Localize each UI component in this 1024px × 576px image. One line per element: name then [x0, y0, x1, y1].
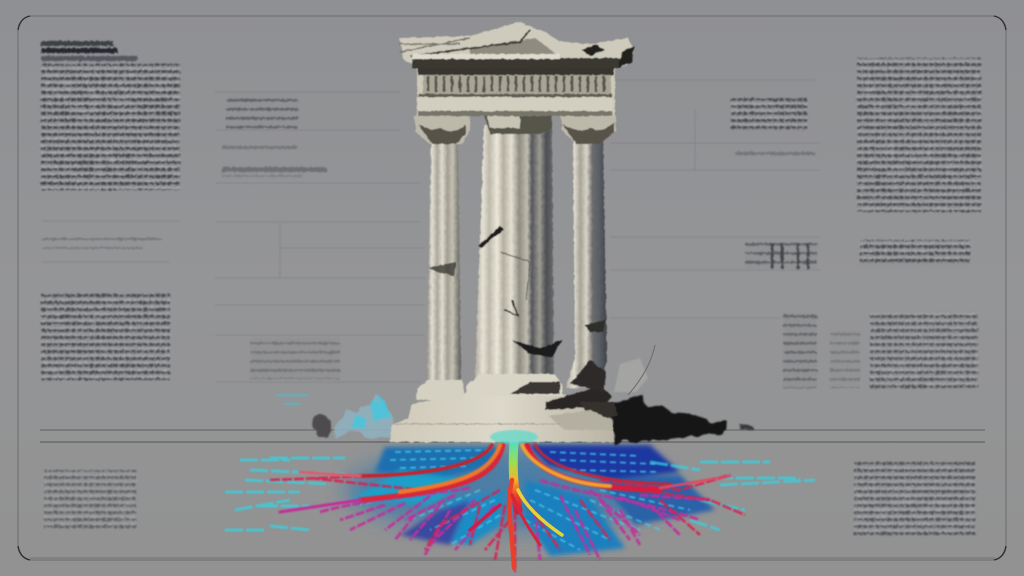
faint diagram grid lines [42, 80, 820, 382]
water splash left of base [310, 396, 394, 437]
ground line [30, 430, 995, 558]
centre column [466, 125, 562, 396]
cyan outer fringes [225, 458, 815, 530]
text block: middle right heading [860, 240, 970, 264]
rubble pile right of base [614, 345, 754, 442]
stylobate steps [390, 386, 618, 442]
magenta branches [320, 480, 710, 560]
main right red-yellow root [522, 445, 730, 490]
pediment [399, 22, 634, 68]
entablature [417, 66, 615, 116]
text block: middle left column [41, 238, 170, 380]
main left red-orange root [280, 445, 503, 512]
crimson branches [270, 475, 745, 572]
text block: top left column [41, 41, 180, 190]
text block: bottom right column [854, 462, 975, 536]
deep blue soil wedges [350, 445, 715, 556]
text block: lower right column [783, 312, 978, 388]
left column [416, 140, 464, 400]
spray droplets [276, 395, 308, 404]
right column [566, 138, 607, 392]
text block: inner left notes [222, 94, 340, 379]
capitals [414, 114, 616, 144]
glow where taproot meets base [490, 430, 538, 444]
text block: bottom left column [44, 470, 136, 528]
central spectrum taproot [470, 442, 562, 568]
dashed cyan texture over the soil [360, 450, 690, 550]
text block: inner right notes [731, 97, 817, 269]
text block: top right column [857, 58, 981, 212]
root haze [345, 450, 675, 530]
column temple [390, 22, 634, 442]
roots: rainbow root system [225, 442, 815, 572]
